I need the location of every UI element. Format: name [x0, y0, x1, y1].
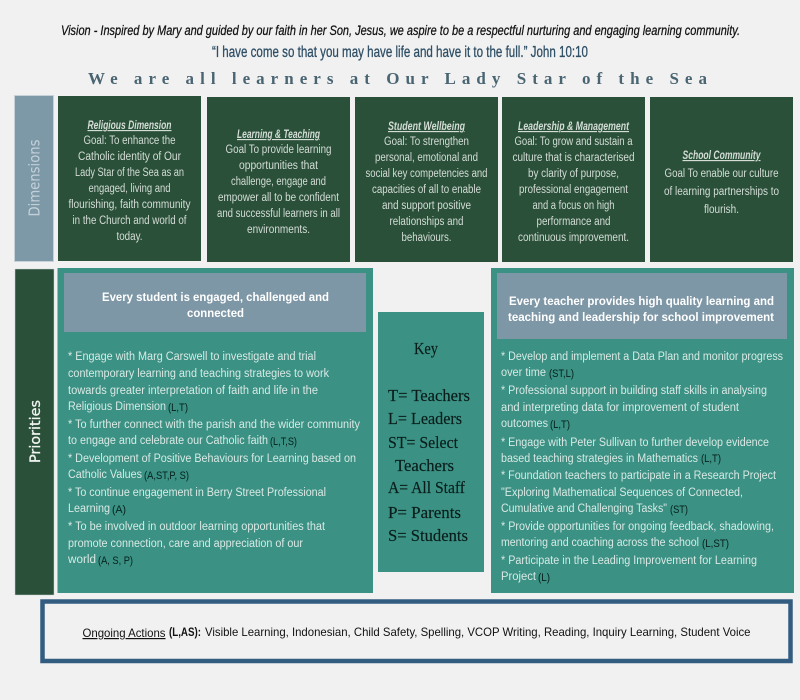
text block: student actions: (A, S, P) — [98, 555, 133, 567]
text block: student actions: * Development of Positive Behaviours for Learning based on — [68, 453, 356, 465]
panel: school community: School Community — [682, 150, 761, 162]
panel: religious dimension: flourishing, faith community — [68, 199, 191, 211]
heading: teacher priority: Every teacher provides high quality learning and — [509, 294, 774, 308]
panel: school community: flourish. — [704, 204, 739, 216]
text block: teacher actions: * Provide opportunities for ongoing feedback, shadowing, — [501, 521, 774, 533]
heading: student priority — [64, 273, 366, 332]
text block: student actions: to engage and celebrate our Catholic faith — [68, 435, 268, 447]
panel: student wellbeing: social key competencies and — [366, 168, 488, 180]
panel: priorities label — [15, 269, 54, 595]
panel: student priority — [58, 268, 373, 593]
panel: leadership and management: professional engagement — [519, 184, 629, 196]
panel: dimensions label — [14, 96, 54, 262]
panel: religious dimension: in the Church and world of — [72, 215, 187, 227]
text block: student actions: Learning — [68, 503, 110, 515]
text block: student actions: Religious Dimension — [68, 401, 166, 413]
panel: student wellbeing: personal, emotional and — [375, 152, 478, 164]
text block: student actions: promote connection, care and appreciation of our — [68, 538, 303, 550]
panel: learning and teaching: challenge, engage and — [231, 176, 326, 188]
panel: learning and teaching: opportunities that — [239, 160, 319, 172]
panel: teacher priority — [491, 268, 794, 593]
panel: key: A= All Staff — [388, 478, 465, 497]
text block: teacher actions: * Professional support in building staff skills in analysing — [501, 385, 767, 397]
panel: key: ST= Select — [388, 433, 458, 452]
panel: religious dimension: Lady Star of the Sea as an — [75, 167, 184, 179]
text block: teacher actions: * Engage with Peter Sullivan to further develop evidence — [501, 437, 769, 449]
panel: leadership and management: Goal: To grow and sustain a — [514, 136, 633, 148]
panel: student wellbeing: behaviours. — [402, 232, 452, 244]
panel: leadership and management: continuous improvement. — [518, 232, 629, 244]
heading: student priority: connected — [187, 306, 244, 320]
panel: religious dimension: today. — [116, 231, 142, 243]
text block: student actions: Catholic Values — [68, 469, 142, 481]
panel: leadership and management — [502, 97, 645, 262]
heading: teacher priority — [497, 273, 787, 339]
panel: religious dimension — [58, 96, 201, 261]
text block: teacher actions: outcomes — [501, 418, 548, 430]
scripture quote: “I have come so that you may have life and have it to the full.” John 10:10 — [212, 44, 588, 61]
panel: student wellbeing: Goal: To strengthen — [384, 136, 469, 148]
panel: leadership and management: performance and — [536, 216, 610, 228]
panel: learning and teaching: empower all to be confident — [218, 192, 340, 204]
panel: student wellbeing — [355, 97, 498, 262]
panel: school community — [650, 97, 793, 262]
text block: teacher actions: (L) — [538, 572, 550, 584]
text block: student actions: (A) — [112, 504, 126, 516]
panel: leadership and management: Leadership & Management — [518, 121, 630, 133]
text block: teacher actions: (L,T) — [550, 419, 570, 431]
panel: key: P= Parents — [388, 503, 461, 522]
text block: teacher actions — [501, 351, 783, 584]
text block: teacher actions: * Develop and implement a Data Plan and monitor progress — [501, 351, 783, 363]
panel: key: Key — [414, 339, 439, 358]
callout: ongoing actions: Ongoing Actions — [82, 626, 166, 640]
text block: student actions — [67, 351, 360, 567]
text block: teacher actions: based teaching strategies in Mathematics — [501, 453, 698, 465]
panel: religious dimension: Catholic identity of Our — [78, 151, 181, 163]
panel: key: L= Leaders — [388, 409, 462, 428]
text block: student actions: towards greater interpretation of faith and life in the — [68, 385, 318, 397]
text block: teacher actions: "Exploring Mathematical Sequences of Connected, — [501, 487, 743, 499]
panel: leadership and management: by clarity of purpose, — [528, 168, 619, 180]
panel: student wellbeing: relationships and — [390, 216, 464, 228]
text block: teacher actions: and interpreting data for improvement of student — [501, 402, 740, 414]
text block: teacher actions: over time — [501, 367, 546, 379]
heading: teacher priority: teaching and leadership for school improvement — [508, 310, 774, 324]
panel: religious dimension: engaged, living and — [88, 183, 170, 195]
text block: teacher actions: mentoring and coaching across the school — [501, 537, 699, 549]
panel: student wellbeing: and support positive — [382, 200, 471, 212]
panel: key: S= Students — [388, 526, 468, 545]
panel: key — [378, 312, 484, 572]
text block: student actions: world — [67, 554, 96, 566]
text block: teacher actions: * Foundation teachers to participate in a Research Project — [501, 470, 777, 482]
panel: leadership and management: and a focus on high — [532, 200, 614, 212]
text block: student actions: (L,T) — [168, 402, 188, 414]
panel: school community: Goal To enable our culture — [664, 168, 778, 180]
text block: student actions: (A,ST,P, S) — [144, 470, 189, 482]
text block: student actions: * To be involved in outdoor learning opportunities that — [68, 521, 326, 533]
heading: student priority: Every student is engaged, challenged and — [102, 290, 329, 304]
text block: student actions: (L,T,S) — [270, 436, 297, 448]
callout: ongoing actions: Visible Learning, Indonesian, Child Safety, Spelling, VCOP Writing, Reading, Inquiry Learning, Student Voice — [205, 625, 751, 639]
text block: teacher actions: (L,T) — [701, 453, 721, 465]
title: We are all learners at Our Lady Star of the Sea — [88, 69, 708, 88]
panel: learning and teaching: and successful learners in all — [217, 208, 340, 220]
text block: teacher actions: Cumulative and Challenging Tasks" — [501, 503, 667, 515]
panel: key: T= Teachers — [388, 386, 470, 405]
panel: student wellbeing: Student Wellbeing — [388, 121, 465, 133]
panel: learning and teaching: environments. — [247, 224, 310, 236]
panel: student wellbeing: capacities of all to enable — [372, 184, 481, 196]
panel: religious dimension: Religious Dimension — [88, 120, 172, 132]
text block: teacher actions: (L,ST) — [702, 538, 729, 550]
text block: student actions: * To further connect with the parish and the wider community — [68, 419, 360, 431]
text block: student actions: * To continue engagement in Berry Street Professional — [68, 487, 326, 499]
panel: learning and teaching: Learning & Teaching — [237, 129, 320, 141]
panel: learning and teaching — [207, 97, 350, 262]
panel: key: Teachers — [395, 456, 454, 475]
text block: teacher actions: * Participate in the Leading Improvement for Learning — [501, 555, 757, 567]
text block: teacher actions: (ST,L) — [549, 368, 574, 380]
text block: teacher actions: Project — [501, 571, 537, 583]
text block: student actions: contemporary learning and teaching strategies to work — [68, 368, 329, 380]
panel: priorities label: Priorities — [28, 400, 44, 463]
panel: leadership and management: culture that is characterised — [512, 152, 634, 164]
text block: student actions: * Engage with Marg Carswell to investigate and trial — [68, 351, 316, 363]
panel: religious dimension: Goal: To enhance the — [84, 135, 176, 147]
panel: dimensions label: Dimensions — [26, 139, 44, 216]
text block: teacher actions: (ST) — [670, 504, 688, 516]
panel: learning and teaching: Goal To provide learning — [226, 144, 332, 156]
callout: ongoing actions — [42, 602, 790, 661]
callout: ongoing actions: (L,AS): — [169, 625, 201, 639]
panel: school community: of learning partnerships to — [664, 186, 779, 198]
